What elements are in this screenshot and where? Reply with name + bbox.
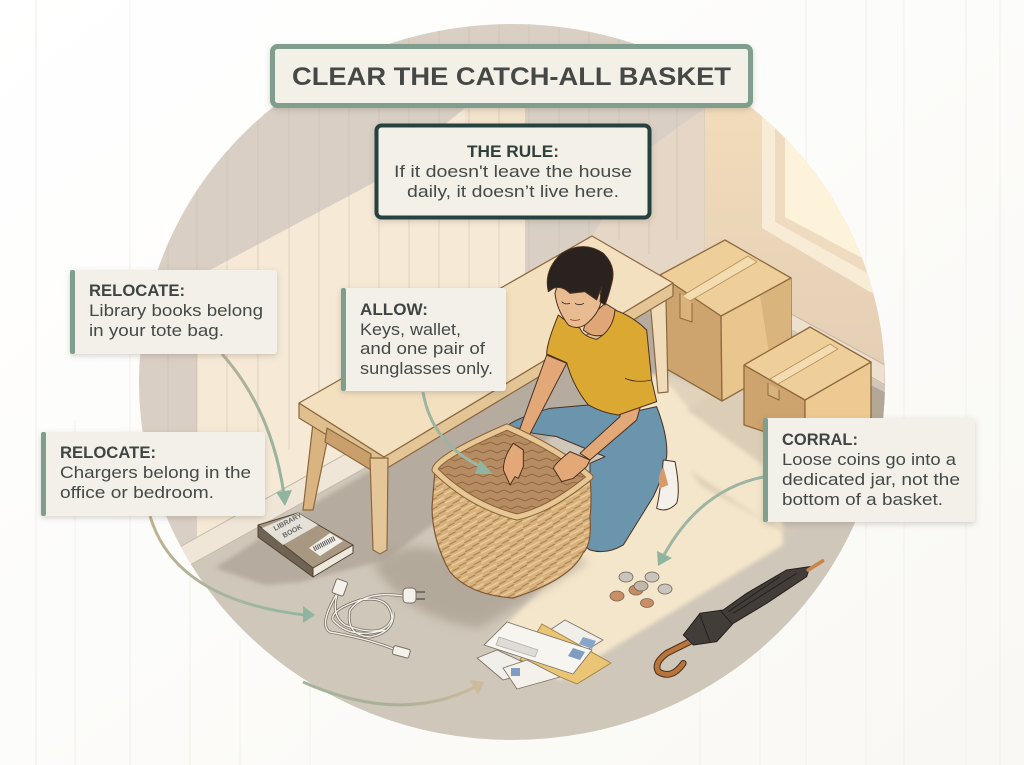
umbrella [657,561,823,674]
illustration: room scene in circle [120,20,900,760]
arrow: library books to book [222,354,292,506]
library book: BOOK [282,524,303,540]
floor [180,310,885,740]
cardboard boxes [660,240,871,445]
basket shadow [373,547,590,628]
callout: relocate chargers: RELOCATE: [60,443,156,462]
envelopes [477,620,611,689]
bench [299,236,673,554]
library book [258,512,353,577]
callout: relocate library books: in your tote bag. [89,321,224,340]
callout: relocate library books: RELOCATE: [89,281,185,300]
rule callout: daily, it doesn’t live here. [407,182,619,201]
callout: allow: sunglasses only. [360,359,493,378]
title banner: CLEAR THE CATCH-ALL BASKET [292,63,731,91]
callout: relocate library books [70,270,277,354]
person kneeling [508,247,678,552]
callout: allow: Keys, wallet, [360,320,461,339]
rule callout: If it doesn't leave the house [394,162,632,181]
arrow: chargers to cable [150,516,315,623]
callout: corral: Loose coins go into a [782,450,957,469]
callout: allow: and one pair of [360,339,485,358]
back wall [130,20,730,580]
callout: corral: bottom of a basket. [782,490,943,509]
callout: relocate chargers: Chargers belong in the [60,463,251,482]
callout: allow: ALLOW: [360,300,428,319]
arrow: to envelopes [303,680,484,705]
charger cable [326,578,425,658]
callout: relocate chargers [41,432,265,516]
callout: relocate chargers: office or bedroom. [60,483,214,502]
coins [610,572,672,608]
callout: corral: dedicated jar, not the [782,470,960,489]
callout: corral [763,418,975,522]
title banner [272,46,750,106]
arrow: corral to coins [657,477,763,566]
right wall and window [705,106,885,418]
rule callout: THE RULE: [467,142,559,161]
callout: corral: CORRAL: [782,430,858,449]
callout: relocate library books: Library books belong [89,301,263,320]
callout: allow [341,288,506,391]
woven basket [432,427,591,598]
arrow: allow to basket [423,392,493,474]
rule callout [376,126,650,218]
library book: LIBRARY [273,512,303,533]
